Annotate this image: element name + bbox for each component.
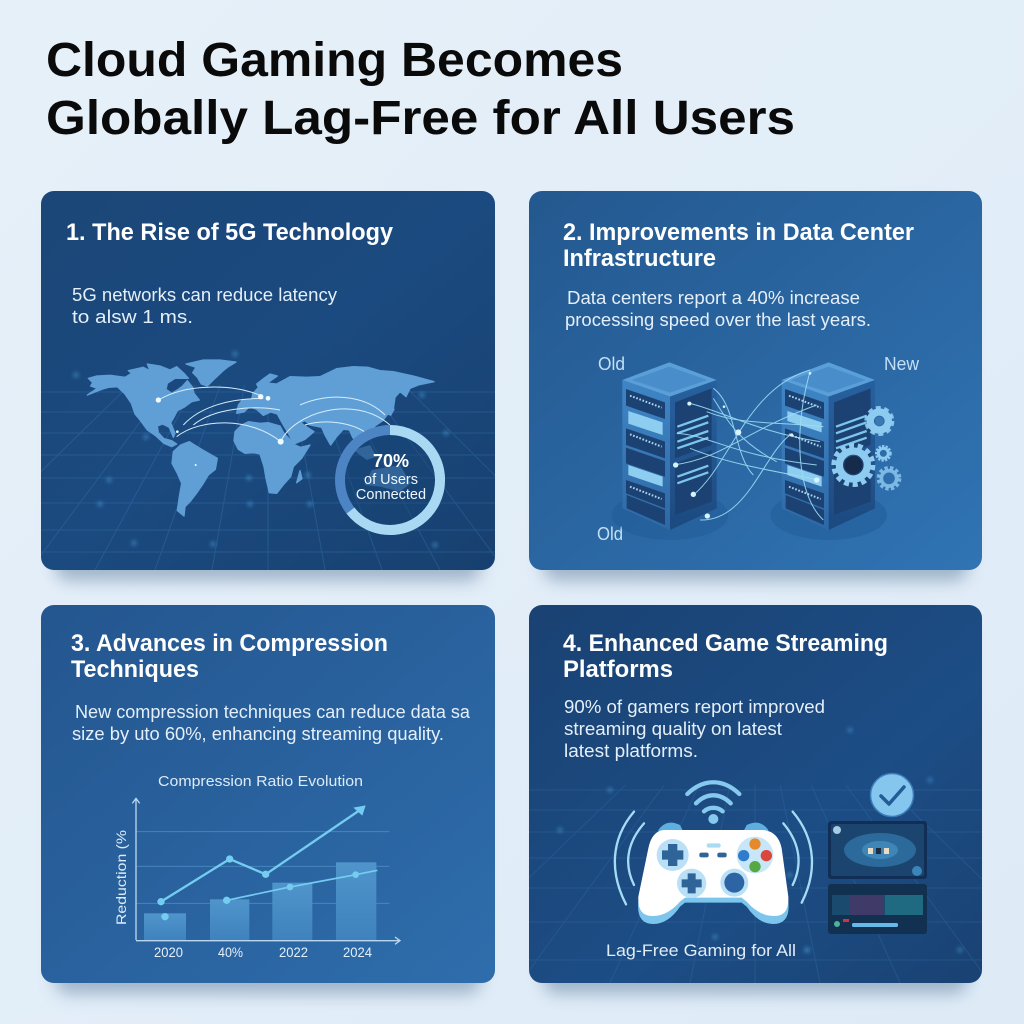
panel heading <box>71 630 388 683</box>
donut: 70% of users connected: Connected <box>356 487 426 503</box>
icon: game controller with wifi <box>615 782 812 924</box>
body text: to alsw 1 ms. <box>72 307 193 327</box>
body text: New compression techniques can reduce data sa <box>75 702 471 722</box>
panel heading: 1. The Rise of 5G Technology <box>66 219 394 246</box>
panel heading <box>563 219 914 272</box>
x axis labels <box>154 945 372 960</box>
data cables <box>673 370 823 520</box>
panel heading: 3. Advances in Compression <box>71 630 388 657</box>
chart: compression ratio evolution: Compression Ratio Evolution <box>158 773 363 790</box>
server racks with connections <box>612 362 900 540</box>
body text: size by uto 60%, enhancing streaming quality. <box>72 724 444 744</box>
body text: streaming quality on latest <box>564 719 782 739</box>
x axis labels: 2024 <box>343 945 372 960</box>
caption: Lag-Free Gaming for All <box>606 941 796 960</box>
donut: 70% of users connected <box>340 430 440 530</box>
x axis labels: 2020 <box>154 945 183 960</box>
panel: 5G technology <box>41 191 495 590</box>
body text <box>72 285 337 327</box>
panel: game streaming platforms <box>529 605 982 1004</box>
body text: latest platforms. <box>564 741 698 761</box>
labels: old and new: Old <box>597 524 623 544</box>
body text <box>72 702 471 744</box>
icon: check badge <box>870 774 914 816</box>
glowing network dots <box>74 352 448 547</box>
body text: processing speed over the last years. <box>565 310 871 330</box>
panel: compression techniques <box>41 605 495 994</box>
chart: compression ratio evolution <box>113 773 400 960</box>
panel heading: Platforms <box>563 656 673 683</box>
world map <box>87 360 434 516</box>
y axis label: Reduction (% <box>113 830 129 925</box>
body text: Data centers report a 40% increase <box>567 288 860 308</box>
title <box>46 34 795 145</box>
donut: 70% of users connected: of Users <box>364 472 418 488</box>
labels: old and new: Old <box>598 354 625 374</box>
panel heading: Infrastructure <box>563 245 716 272</box>
donut: 70% of users connected: 70% <box>373 451 409 471</box>
gears <box>834 408 900 489</box>
panel heading <box>563 630 888 683</box>
labels: old and new: New <box>884 354 920 374</box>
old server rack <box>622 362 717 530</box>
title: Globally Lag-Free for All Users <box>46 92 795 145</box>
body text <box>564 697 825 761</box>
panel heading: Techniques <box>71 656 199 683</box>
screen: platform interface <box>828 884 927 934</box>
new server rack <box>782 362 875 530</box>
icon: signal waves <box>615 812 812 904</box>
body text: 5G networks can reduce latency <box>72 285 337 305</box>
panel: data center infrastructure <box>529 191 982 581</box>
labels: old and new <box>597 354 920 544</box>
x axis labels: 2022 <box>279 945 308 960</box>
x axis labels: 40% <box>218 945 243 960</box>
screen: game interface <box>828 821 927 879</box>
body text <box>565 288 871 330</box>
scattered glow dots <box>558 728 962 952</box>
icon: wifi <box>687 782 739 811</box>
panel heading: 4. Enhanced Game Streaming <box>563 630 888 657</box>
panel heading: 2. Improvements in Data Center <box>563 219 914 246</box>
title: Cloud Gaming Becomes <box>46 34 623 87</box>
body text: 90% of gamers report improved <box>564 697 825 717</box>
